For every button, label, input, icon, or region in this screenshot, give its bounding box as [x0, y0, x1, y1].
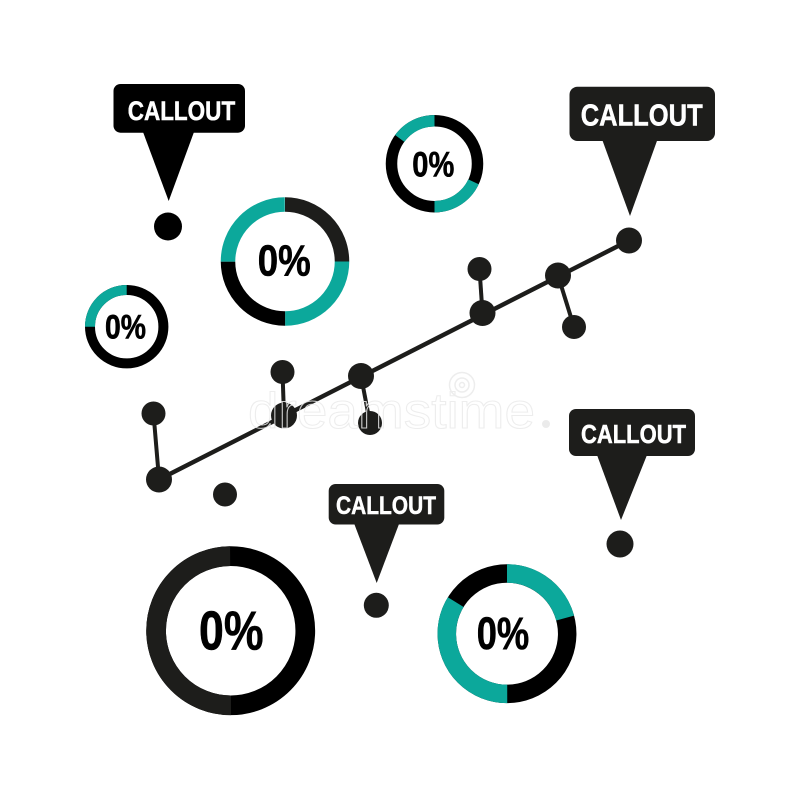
ring chart: large bottom black [156, 556, 305, 705]
ring chart: small left [90, 290, 163, 363]
callout: top left: CALLOUT [128, 96, 235, 126]
callout: top right [570, 87, 715, 216]
callout: right middle: CALLOUT [581, 421, 686, 449]
ring chart: large teal and black quarters [228, 204, 342, 318]
dot: top left callout marker [154, 212, 182, 240]
dot: right callout marker [606, 530, 634, 558]
callout: right middle [569, 409, 695, 520]
dot: lone marker below chart [213, 482, 237, 506]
ring chart: bottom teal and black: 0% [477, 608, 529, 659]
dot: bottom callout marker [364, 593, 389, 618]
ring chart: top centre: 0% [412, 145, 454, 184]
ring chart: top centre [392, 121, 478, 207]
callout: top left [114, 84, 245, 201]
ring chart: small left: 0% [105, 308, 146, 346]
callout: top right: CALLOUT [581, 98, 703, 132]
callout: bottom centre [329, 484, 444, 583]
watermark: dreamstime [248, 383, 535, 439]
line chart: connected nodes [142, 228, 642, 492]
ring chart: bottom teal and black [447, 574, 567, 694]
ring chart: large bottom black: 0% [199, 600, 264, 662]
ring chart: large teal and black quarters: 0% [258, 237, 311, 286]
callout: bottom centre: CALLOUT [336, 492, 436, 520]
